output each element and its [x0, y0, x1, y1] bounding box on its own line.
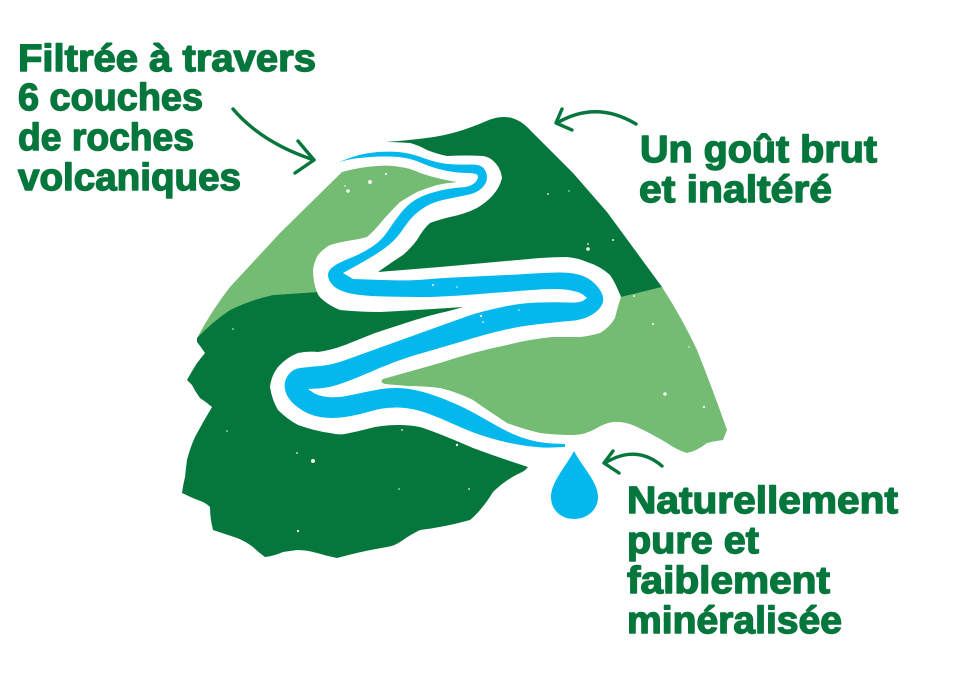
lower dark green massif [182, 292, 528, 558]
mountain illustration [182, 117, 727, 558]
upper dark green peak [378, 117, 662, 297]
text: taste: Un goût brut [640, 129, 877, 171]
light green upper-left slope [197, 166, 457, 338]
text: filtration: Filtrée à travers [18, 38, 316, 80]
text: purity: pure et [627, 520, 759, 562]
arrow: to mountain peak [556, 109, 636, 130]
text: taste: et inaltéré [639, 169, 832, 211]
arrow: to river source [233, 109, 314, 173]
arrow: to water drop [604, 451, 662, 473]
text: filtration: de roches [18, 117, 194, 159]
text: taste [639, 129, 877, 211]
blue river [285, 152, 603, 448]
white speckle texture [226, 173, 705, 532]
text: filtration: volcaniques [18, 157, 241, 199]
light green lower-right slope [381, 287, 727, 453]
text: purity [627, 480, 898, 642]
text: purity: minéralisée [627, 600, 842, 642]
text: filtration [18, 38, 316, 199]
text: purity: Naturellement [627, 480, 898, 522]
water drop [551, 451, 598, 519]
text: filtration: 6 couches [18, 77, 203, 119]
text: purity: faiblement [627, 560, 830, 602]
